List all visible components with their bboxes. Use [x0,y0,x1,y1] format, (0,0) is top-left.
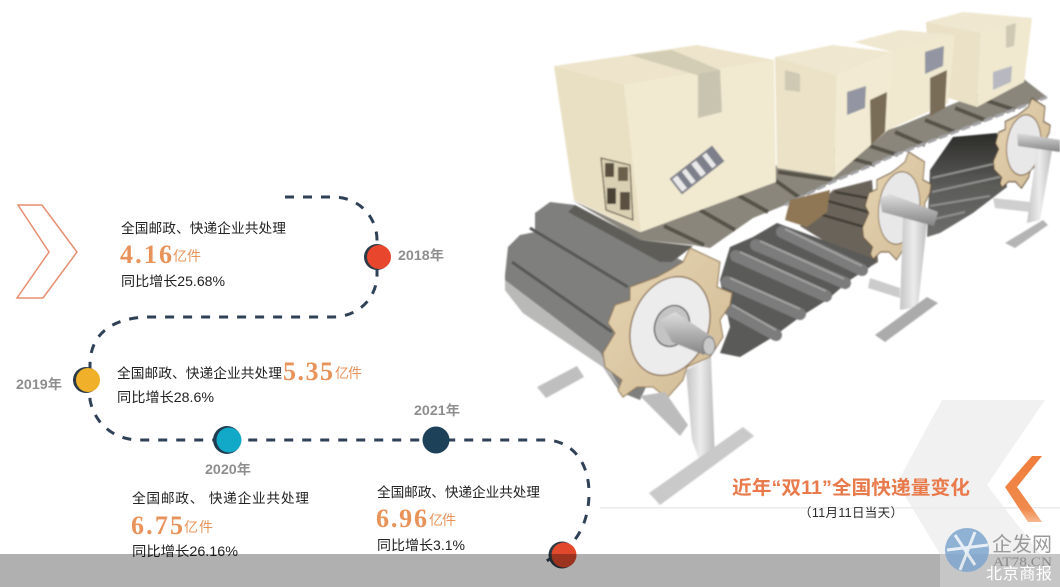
lower belt ribs [720,223,877,357]
text block 2021: 亿件 [429,512,456,528]
label 2019: 2019年 [16,376,62,392]
box 4 [926,12,1032,107]
light grey chevron backdrop [897,400,1045,554]
text block 2018: 亿件 [173,248,201,264]
rear feet and brace [537,366,688,436]
text block 2019: 亿件 [335,365,362,381]
watermark logo [945,528,989,572]
front shaft [660,312,715,355]
box 2 [775,45,892,177]
middle stand [868,217,938,342]
title: 近年“双11”全国快递量变化 [732,476,970,499]
middle shaft [880,194,938,226]
bottom band [0,554,940,587]
dark rear belt [927,133,1007,237]
conveyor illustration [505,12,1060,505]
barcode label [670,145,724,195]
node latest [548,542,576,568]
front stand [649,357,754,505]
subtitle: （11月11日当天） [799,506,903,520]
box 3 [854,30,955,130]
text block 2019 [117,357,362,405]
box 1 [554,45,776,232]
text block 2020: 同比增长26.16% [132,544,238,559]
text block 2018: 同比增长25.68% [121,274,225,289]
icon: middle gear [863,152,931,260]
icon: front gear [603,248,732,398]
text block 2019: 同比增长28.6% [117,390,214,405]
source label: 北京商报 [986,565,1052,583]
text block 2018: 全国邮政、快递企业共处理 [121,220,286,236]
node 2019 [73,367,100,393]
handling symbols [601,158,633,220]
front roller ribs [505,202,700,400]
text block 2021: 同比增长3.1% [377,538,465,553]
text block 2020 [131,490,309,559]
watermark text: AT78.CN [993,554,1053,569]
rear shaft [1017,133,1060,152]
label 2020: 2020年 [205,461,251,477]
text block 2018: 4.16 [120,240,172,269]
watermark text [992,533,1053,569]
label 2021: 2021年 [414,402,460,418]
text block 2019: 5.35 [283,357,333,386]
bottom band right section [940,554,1060,587]
ribs behind middle gear [800,180,878,268]
icon: outlined chevron [17,205,77,298]
watermark text: 企发网 [992,533,1052,556]
node 2020 [213,426,242,454]
text block 2020: 全国邮政、 快递企业共处理 [132,490,309,506]
icon: rear gear [993,98,1050,188]
text block 2019: 全国邮政、快递企业共处理 [117,365,282,381]
rear stand [993,147,1052,248]
node 2021 [422,426,450,454]
node 2018 [364,244,391,270]
icon: orange chevron [1005,456,1042,522]
timeline dashed path [90,197,589,562]
text block 2021: 6.96 [376,504,427,533]
text block 2021: 全国邮政、快递企业共处理 [377,484,540,500]
text block 2018 [120,220,286,289]
text block 2020: 亿件 [184,519,213,535]
upper belt [572,76,1047,248]
text block 2021 [376,484,540,553]
title rule line [600,507,1060,508]
label 2018: 2018年 [398,247,444,263]
rear small gear piece [785,190,830,227]
text block 2020: 6.75 [131,511,183,540]
